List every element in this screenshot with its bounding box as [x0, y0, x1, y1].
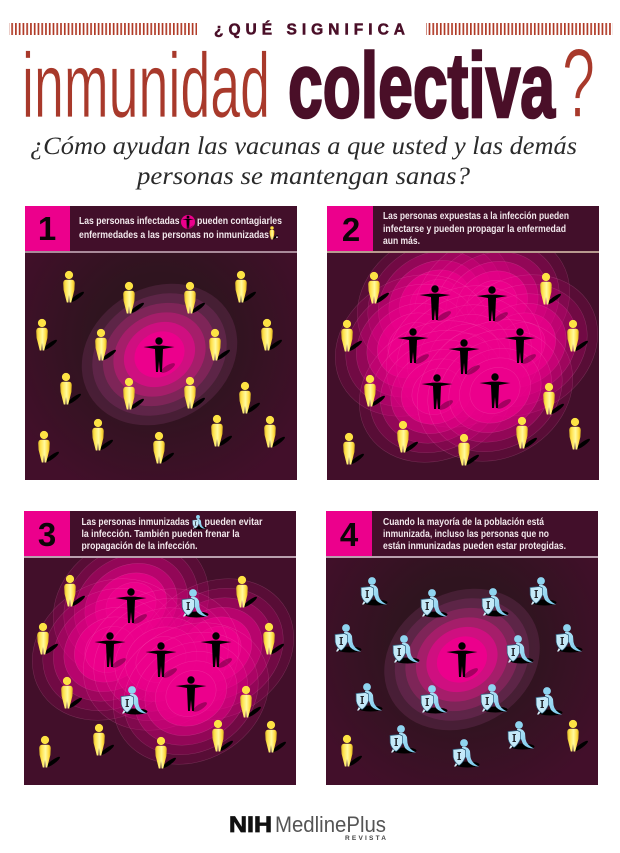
- infected people: [94, 588, 233, 714]
- panel 4 header: [326, 511, 598, 558]
- panel 1 header: [25, 206, 297, 253]
- panel 4 header: están inmunizadas pueden estar protegidas.: [383, 540, 566, 552]
- subtitle: personas se mantengan sanas?: [135, 161, 470, 190]
- logo: NIH MedlinePlus Revista: [229, 812, 386, 842]
- subtitle: ¿Cómo ayudan las vacunas a que usted y las demás: [30, 131, 577, 160]
- panel 1 header: 1: [38, 210, 56, 247]
- panel 3 header: pueden evitar: [204, 516, 262, 528]
- panel 1 illustration: [25, 253, 297, 480]
- unimmunized people: [341, 272, 591, 467]
- panel 2: [327, 206, 599, 480]
- title: [22, 28, 595, 138]
- panel 1: [25, 206, 297, 480]
- panel 4 header: inmunizada, incluso las personas que no: [383, 528, 549, 540]
- subtitle: [30, 131, 577, 190]
- infection halo: [384, 588, 540, 730]
- panel 2 header: infectarse y pueden propagar la enfermedad: [383, 223, 566, 235]
- panel 2 illustration: [327, 253, 599, 480]
- infected person: [446, 642, 479, 680]
- title: inmunidad: [22, 35, 270, 137]
- panel 1 header: pueden contagiarles: [197, 215, 282, 227]
- panel 2 header: 2: [342, 211, 360, 248]
- panel 4 header: 4: [340, 516, 359, 553]
- infected person: [144, 337, 176, 375]
- panel 3 header: Las personas inmunizadas: [82, 516, 190, 528]
- panel 1 header: .: [276, 229, 278, 241]
- kicker: decorative bars and heading: [9, 22, 613, 38]
- immunized people: [121, 589, 208, 714]
- logo: NIH MedlinePlus Revista: REVISTA: [345, 835, 386, 842]
- unimmunized people: [341, 720, 589, 768]
- panel 2 header: [327, 206, 599, 253]
- infection halo: [82, 284, 238, 426]
- immunized people: [335, 577, 582, 768]
- unimmunized people: [36, 271, 286, 465]
- kicker: decorative bars and heading: ¿QUÉ SIGNIFICA: [214, 22, 405, 38]
- logo: NIH MedlinePlus Revista: NIH: [229, 812, 272, 837]
- infection halos: [335, 253, 598, 462]
- panel 3 header: [24, 511, 296, 558]
- title: ?: [562, 28, 595, 138]
- infection halos: [32, 558, 294, 764]
- panel 3 illustration: [24, 558, 296, 785]
- panel 1 header: Las personas infectadas: [79, 215, 180, 227]
- panel 4: [326, 511, 598, 785]
- logo: NIH MedlinePlus Revista: MedlinePlus: [275, 812, 386, 837]
- panel 3: [24, 511, 296, 785]
- panel 2 header: aun más.: [383, 235, 420, 247]
- panel 2 header: Las personas expuestas a la infección pueden: [383, 210, 569, 222]
- unimmunized people: [37, 575, 287, 770]
- panel 3 header: propagación de la infección.: [82, 540, 198, 552]
- panel 4 header: Cuando la mayoría de la población está: [383, 516, 544, 528]
- panel 3 header: 3: [38, 516, 56, 553]
- panel 1 header: enfermedades a las personas no inmunizadas: [79, 229, 269, 241]
- infected people: [398, 285, 537, 412]
- panel 4 illustration: [326, 558, 598, 785]
- panel 3 header: la infección. También pueden frenar la: [82, 528, 240, 540]
